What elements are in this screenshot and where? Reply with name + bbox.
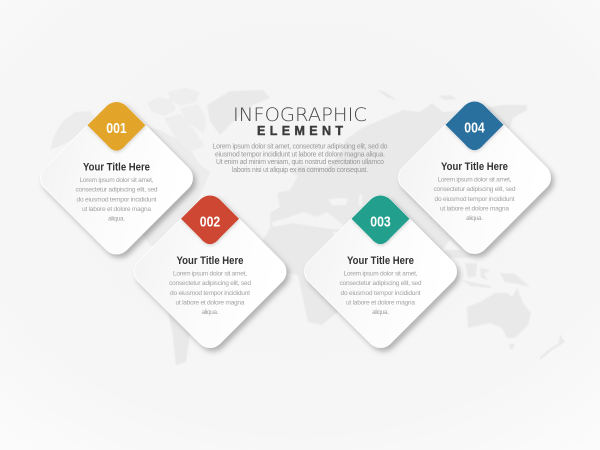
card shape <box>304 195 457 348</box>
intro paragraph: eiusmod tempor incididunt ut labore et dolore magna aliqua. <box>215 152 385 158</box>
card text: consectetur adipiscing elit, sed <box>169 280 251 287</box>
Black Sea <box>328 198 348 205</box>
card text <box>434 176 516 222</box>
Caspian Sea <box>359 195 362 206</box>
card shape <box>398 101 551 254</box>
card text: do eiusmod tempor incididunt <box>170 290 250 297</box>
card text: Lorem ipsum dolor sit amet, <box>344 270 418 278</box>
card shape <box>40 102 193 254</box>
card text: Lorem ipsum dolor sit amet, <box>80 177 154 184</box>
badge 001 <box>88 102 146 151</box>
card text: do eiusmod tempor incididunt <box>434 196 515 203</box>
card text: ut labore et dolore magna <box>82 206 151 213</box>
badge 001: 001 <box>106 121 127 137</box>
Africa <box>260 226 365 325</box>
Indonesia <box>462 280 492 288</box>
card title: Your Title Here <box>83 162 150 174</box>
badge 003: 003 <box>370 214 391 230</box>
Eurasia <box>270 103 527 265</box>
card text <box>340 270 422 316</box>
badge 002: 002 <box>200 214 220 230</box>
South America <box>150 250 225 365</box>
panel: card 003 <box>304 195 457 348</box>
badge 003 <box>352 195 410 244</box>
intro paragraph: laboris nisi ut aliquip ex ea commodo consequat. <box>232 167 368 174</box>
card text <box>76 177 158 223</box>
card text: aliqua. <box>372 309 389 316</box>
card text: consectetur adipiscing elit, sed <box>340 280 422 287</box>
Australia <box>467 288 531 338</box>
card text: aliqua. <box>202 309 219 316</box>
intro paragraph: Ut enim ad minim veniam, quis nostrud exercitation ullamco <box>216 159 384 166</box>
card text: consectetur adipiscing elit, sed <box>434 186 516 193</box>
card text: aliqua. <box>108 216 125 223</box>
Mediterranean <box>272 212 343 230</box>
badge 002 <box>181 195 239 244</box>
intro paragraph <box>212 144 388 174</box>
card text: ut labore et dolore magna <box>440 206 509 212</box>
card text: Lorem ipsum dolor sit amet, <box>173 270 247 278</box>
panel: card 004 <box>398 101 551 254</box>
card text: do eiusmod tempor incididunt <box>76 196 157 203</box>
card text: consectetur adipiscing elit, sed <box>76 187 158 194</box>
card text: aliqua. <box>466 215 483 222</box>
card text: ut labore et dolore magna <box>176 300 245 306</box>
Arctic islands <box>147 88 206 152</box>
badge 004: 004 <box>464 120 485 136</box>
card title: Your Title Here <box>176 255 244 267</box>
North America <box>50 111 210 252</box>
card text: do eiusmod tempor incididunt <box>340 290 421 297</box>
heading: INFOGRAPHIC: INFOGRAPHIC <box>233 105 367 126</box>
card title: Your Title Here <box>441 161 508 173</box>
New Zealand <box>540 334 565 360</box>
card text <box>169 270 251 316</box>
northern islands <box>377 90 397 100</box>
card text: ut labore et dolore magna <box>346 300 415 306</box>
card title: Your Title Here <box>347 255 414 267</box>
intro paragraph: Lorem ipsum dolor sit amet, consectetur adipiscing elit, sed do <box>212 144 388 150</box>
panel: card 001 <box>40 102 193 254</box>
Tasmania <box>509 344 515 349</box>
title block <box>212 105 388 174</box>
badge 004 <box>446 101 504 150</box>
card text: Lorem ipsum dolor sit amet, <box>438 176 512 184</box>
card shape <box>134 195 286 348</box>
Greenland <box>207 90 270 135</box>
world map <box>50 88 565 365</box>
heading: ELEMENT: ELEMENT <box>257 124 343 138</box>
panel: card 002 <box>134 195 286 348</box>
